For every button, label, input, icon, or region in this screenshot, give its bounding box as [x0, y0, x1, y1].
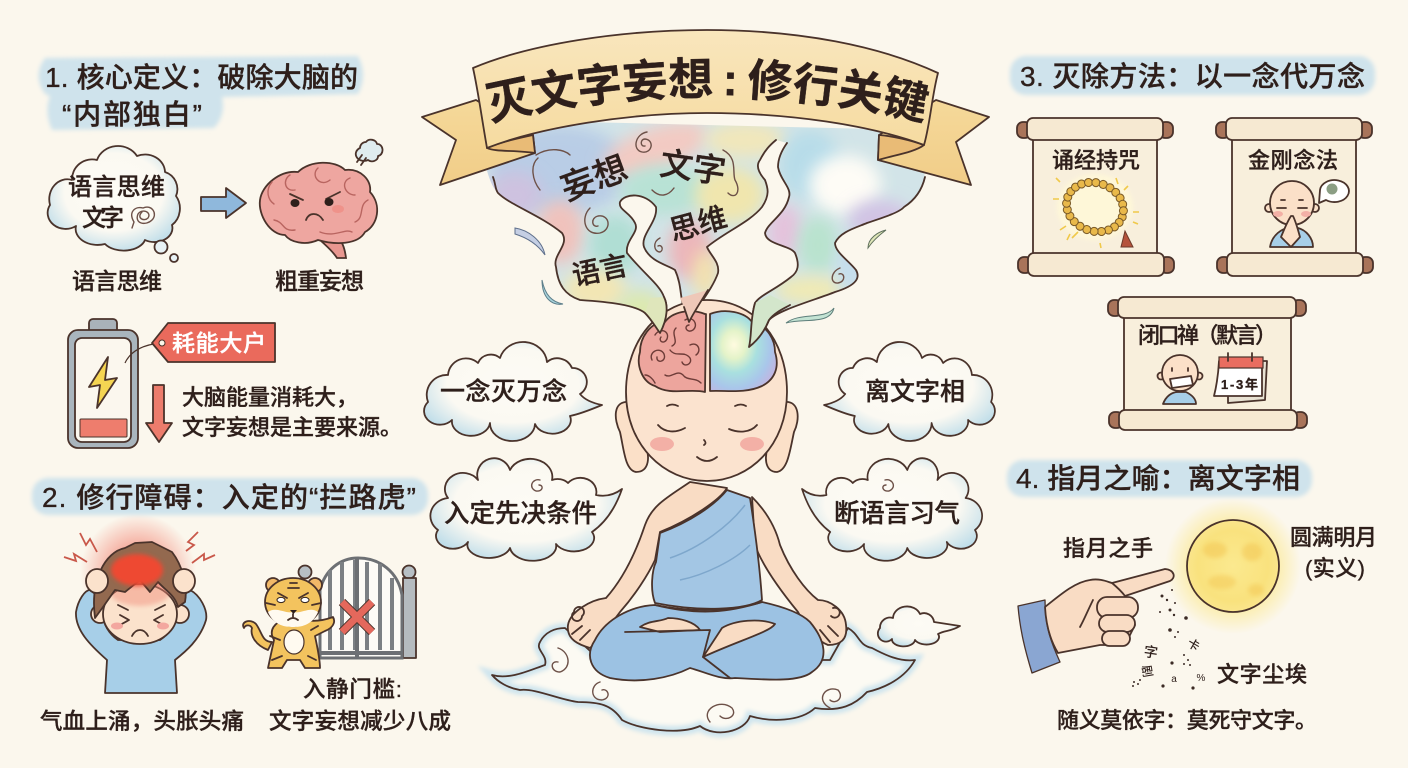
word dust: 字	[1143, 643, 1159, 661]
icon: word scribble	[132, 207, 154, 228]
hand details	[572, 607, 840, 642]
word dust	[1132, 589, 1206, 690]
text: energy note: 文字妄想是主要来源。	[182, 415, 402, 440]
label: language thinking: 语言思维	[72, 268, 162, 294]
red cross	[342, 602, 372, 632]
tag: energy hog	[125, 323, 275, 363]
section 4 heading: 4. 指月之喻：离文字相	[1016, 463, 1300, 494]
tag: energy hog: 耗能大户	[172, 330, 266, 356]
smoke words: 妄想	[556, 149, 633, 208]
side wisps	[515, 228, 886, 323]
tiger	[243, 578, 334, 668]
cloud: cut language habit	[802, 458, 982, 561]
label: headache: 气血上涌，头胀头痛	[40, 709, 244, 734]
smoke words	[556, 145, 731, 291]
steam puff	[356, 140, 383, 161]
feet	[640, 618, 700, 632]
swirls	[533, 132, 844, 283]
label: coarse delusion: 粗重妄想	[275, 268, 364, 294]
cloud: prerequisite of samadhi: 入定先决条件	[444, 500, 597, 528]
label: threshold of stillness: 文字妄想减少八成	[269, 709, 451, 734]
illustration: headache boy	[64, 514, 215, 693]
icon: prayer beads	[1053, 169, 1139, 248]
banner left tail	[422, 100, 535, 185]
scroll: chanting sutras: 诵经持咒	[1052, 148, 1140, 173]
cloud: cut language habit: 断语言习气	[834, 500, 960, 528]
arrow: thought to brain	[201, 188, 246, 218]
rainbow smoke	[487, 122, 925, 312]
label: finger pointing: 指月之手	[1063, 536, 1153, 561]
scroll: chanting sutras	[1017, 118, 1174, 276]
panel: central smoke of thoughts	[487, 122, 926, 328]
brain: luminous right hemisphere	[710, 311, 777, 391]
icon: low battery	[68, 319, 138, 448]
smoke words: 语言	[569, 250, 631, 291]
title banner: 灭文字妄想 : 修行关键	[485, 56, 930, 124]
base cloud	[492, 606, 960, 732]
icon: praying monk	[1265, 180, 1349, 247]
smoke words: 思维	[666, 201, 731, 248]
smoke words: 文字	[658, 145, 728, 190]
pain bolts	[64, 532, 215, 563]
ears	[616, 402, 648, 472]
crossed legs	[590, 602, 824, 680]
icon: calendar 1-3 years: 1-3年	[1221, 377, 1258, 392]
scroll: vajra recitation: 金刚念法	[1248, 148, 1338, 173]
brain: busy left hemisphere	[639, 311, 706, 392]
icon: taped-mouth monk	[1158, 355, 1202, 404]
banner main ribbon	[473, 30, 938, 148]
cloud: leave word form	[824, 342, 995, 441]
scroll: silent meditation: 闭口禅（默言）	[1138, 323, 1277, 348]
skin torso and left arm	[568, 482, 727, 648]
icon: angry brain	[260, 140, 383, 258]
banner right tail	[878, 100, 989, 185]
caption: rely on meaning not words: 随义莫依字：莫死守文字。	[1057, 708, 1317, 733]
title	[485, 95, 930, 122]
word dust: 剧	[1139, 664, 1155, 678]
illustration: gate with tiger	[243, 558, 416, 668]
robe	[652, 490, 762, 609]
arrow: energy down	[146, 385, 172, 442]
label: threshold of stillness	[269, 677, 451, 734]
thought cloud: language thinking: 文字	[82, 205, 124, 232]
cloud: one thought	[424, 342, 602, 441]
head	[626, 300, 787, 481]
cloud: leave word form: 离文字相	[865, 378, 965, 406]
label: full moon true meaning	[1290, 525, 1377, 581]
meditating monk	[492, 290, 960, 732]
section 1 heading	[38, 56, 363, 130]
thought cloud: language thinking	[48, 146, 180, 262]
smoke outline	[493, 140, 776, 333]
thought cloud: language thinking: 语言思维	[68, 174, 165, 201]
icon: pointing hand	[1018, 569, 1174, 673]
text: energy note	[182, 385, 402, 440]
word dust: %	[1197, 673, 1206, 684]
icon: calendar 1-3 years	[1214, 353, 1267, 403]
title banner	[421, 29, 990, 186]
cloud: one thought: 一念灭万念	[440, 378, 567, 406]
word dust: a	[1171, 674, 1177, 685]
label: threshold of stillness: 入静门槛:	[303, 677, 402, 702]
word dust: 卡	[1185, 636, 1202, 654]
label: full moon true meaning: (实义)	[1305, 556, 1365, 581]
wisps into head	[645, 290, 790, 347]
scroll: vajra recitation	[1216, 118, 1373, 276]
cloud: prerequisite of samadhi	[430, 458, 622, 561]
section 1 heading: 1. 核心定义：破除大脑的	[45, 62, 358, 93]
curled fingers	[1097, 597, 1138, 618]
face	[650, 404, 764, 461]
text: energy note: 大脑能量消耗大，	[182, 385, 358, 410]
right arm	[752, 497, 846, 645]
label: word dust: 文字尘埃	[1217, 662, 1307, 687]
scroll: silent meditation	[1108, 297, 1307, 430]
moon	[1165, 498, 1301, 634]
section 1 heading: “内部独白”	[62, 99, 202, 130]
section 2 heading: 2. 修行障碍：入定的“拦路虎”	[42, 482, 416, 513]
label: full moon true meaning: 圆满明月	[1290, 525, 1377, 550]
section 3 heading: 3. 灭除方法：以一念代万念	[1020, 61, 1365, 92]
gate	[298, 558, 416, 658]
